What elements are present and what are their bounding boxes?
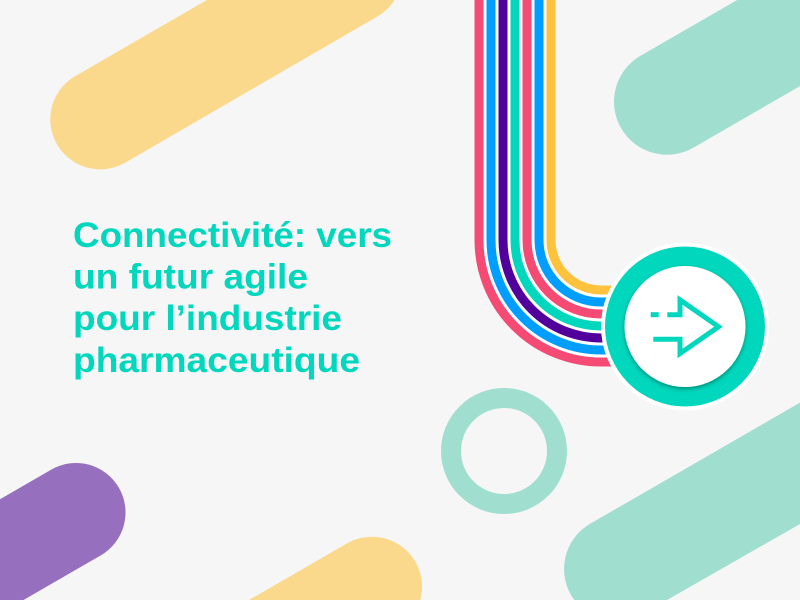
title <box>73 216 392 380</box>
capsule: yellow top <box>50 0 395 169</box>
capsule: teal top right <box>614 0 800 155</box>
capsule: purple bottom left <box>0 463 126 600</box>
icon: arrow badge <box>601 242 769 410</box>
capsule: teal bottom right <box>564 403 800 600</box>
icon: arrow <box>651 300 718 354</box>
title: pharmaceutique <box>73 341 360 380</box>
capsule: yellow bottom <box>249 537 422 600</box>
rainbow stripes <box>479 0 640 362</box>
ring: teal <box>451 398 557 504</box>
title: pour l’industrie <box>73 299 342 338</box>
title: un futur agile <box>73 258 308 296</box>
title: Connectivité: vers <box>73 216 392 255</box>
